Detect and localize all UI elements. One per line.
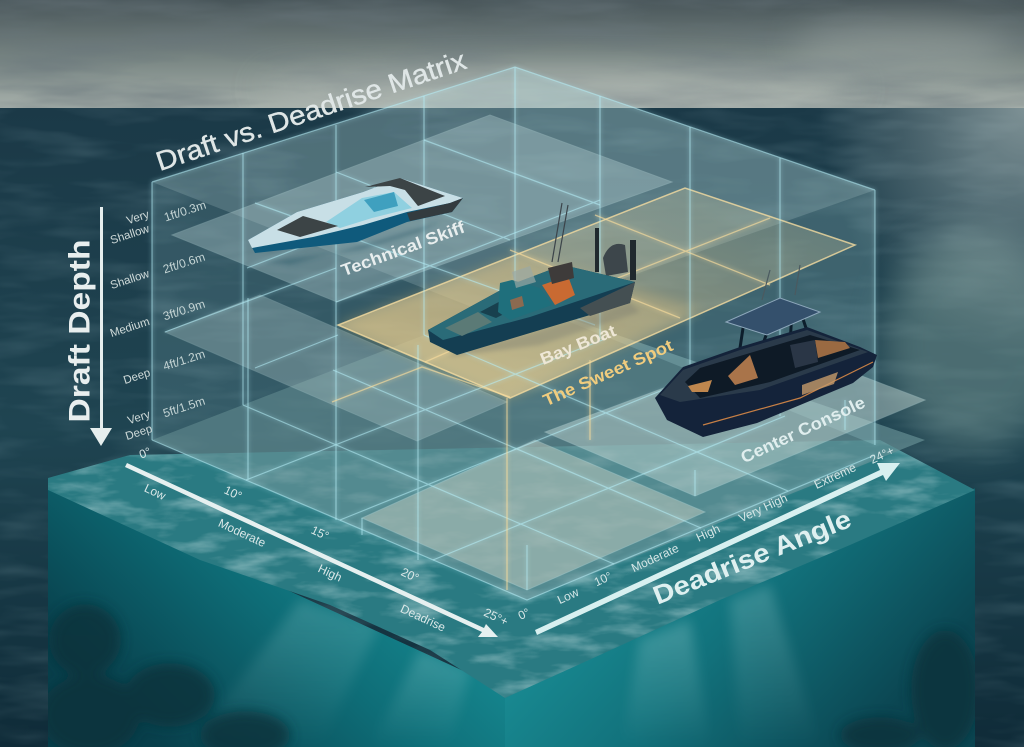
deadrise axis: left side (125, 444, 510, 637)
boat: bay boat (428, 203, 640, 357)
draft depth axis: Deep (122, 367, 152, 387)
deadrise axis: left side: Deadrise (398, 602, 448, 635)
deadrise axis: right side (516, 443, 900, 635)
label: technical skiff: Technical Skiff (339, 218, 468, 280)
deadrise axis: left side: Moderate (216, 516, 268, 550)
deadrise axis: right side: 24°+ (868, 443, 896, 467)
label: center console: Center Console (738, 393, 868, 467)
plate: sweet spot (338, 188, 855, 398)
plate: lower front shelf (362, 440, 705, 590)
plate: medium depth shelf (165, 295, 507, 441)
deadrise axis: right side: High (694, 521, 722, 545)
glass box: back walls (152, 67, 875, 445)
draft depth axis: Shallow (109, 268, 152, 292)
title: Draft vs. Deadrise Matrix (152, 45, 470, 177)
sweet spot grid lines (332, 215, 770, 590)
water block: surface band (48, 440, 978, 700)
deadrise axis: left side: 25°+ (482, 605, 510, 629)
glass grid lines (152, 67, 875, 600)
deadrise axis: left side: 10° (222, 483, 244, 503)
background: stormy sky (0, 0, 1024, 112)
water block: right underwater face (505, 488, 979, 747)
deadrise axis: left side: Low (142, 481, 168, 503)
label: bay boat: Bay Boat (537, 321, 619, 369)
deadrise axis: right side: Deadrise Angle (649, 504, 855, 610)
draft depth axis: Draft Depth (64, 239, 96, 423)
draft depth axis (64, 198, 208, 446)
draft depth axis: 5ft/1.5m (161, 394, 207, 420)
draft depth axis: Deep (124, 423, 154, 443)
water block: left underwater face (40, 480, 505, 747)
deadrise axis: right side: Very High (736, 491, 790, 525)
draft depth axis: 4ft/1.2m (161, 347, 207, 373)
deadrise axis: right side: Low (555, 585, 581, 607)
deadrise axis: right side: Extreme (812, 460, 858, 492)
glass box: floor (152, 300, 925, 600)
deadrise axis: left side: High (316, 561, 344, 585)
draft depth axis: 2ft/0.6m (161, 250, 207, 276)
deadrise axis: left side: 15° (309, 523, 331, 543)
deadrise axis: left side: 0° (137, 444, 153, 462)
deadrise axis: left side: 20° (399, 565, 421, 585)
draft depth axis: 3ft/0.9m (161, 297, 207, 323)
draft depth axis: Very (125, 209, 151, 227)
label: the sweet spot: The Sweet Spot (540, 336, 676, 410)
plate: technical skiff shelf (172, 115, 672, 302)
deadrise axis: right side: 0° (516, 605, 532, 623)
deadrise axis: right side: Moderate (629, 541, 681, 575)
plate: center console shelf (545, 345, 925, 496)
boat: technical skiff (248, 178, 463, 265)
boat: center console (655, 265, 877, 437)
draft depth axis: Medium (109, 316, 151, 340)
draft depth axis: 1ft/0.3m (162, 198, 208, 224)
draft depth axis: Shallow (109, 223, 152, 247)
draft depth axis: Very (126, 409, 152, 427)
deadrise axis: right side: 10° (592, 569, 614, 589)
